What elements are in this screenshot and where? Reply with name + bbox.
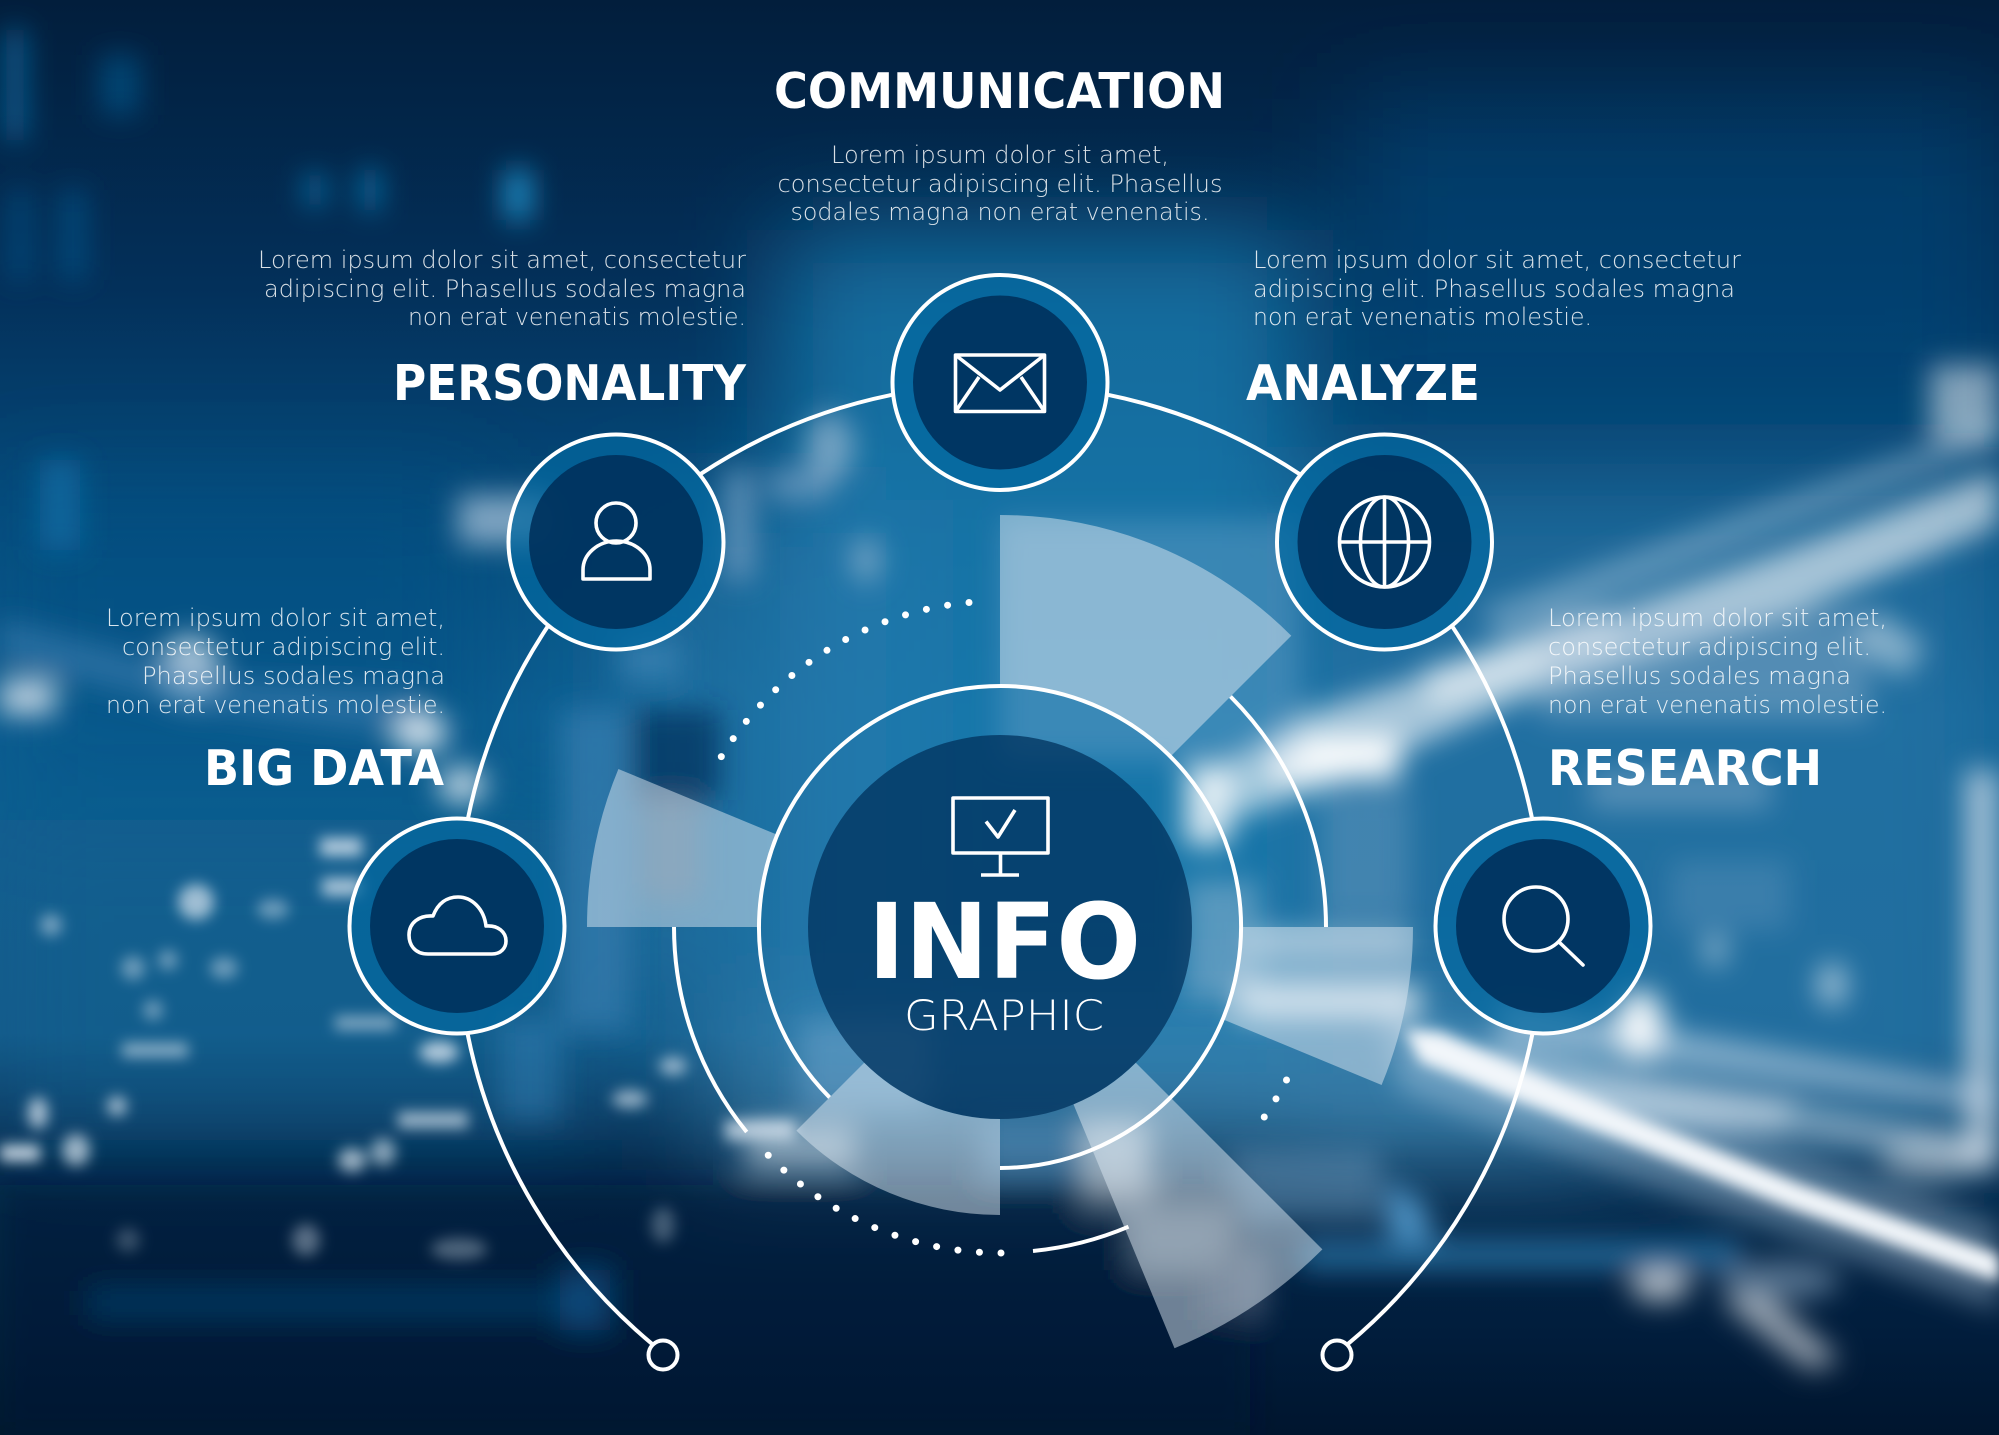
end marker right — [1322, 1340, 1352, 1370]
heading: communication: COMMUNICATION — [774, 63, 1225, 120]
middle arcs — [674, 696, 1326, 1251]
text: big data: non erat venenatis molestie. — [106, 691, 445, 719]
icon: person — [583, 503, 650, 579]
text: communication: consectetur adipiscing elit. Phasellus — [778, 170, 1222, 198]
text: analyze: non erat venenatis molestie. — [1253, 303, 1592, 331]
heading: research: RESEARCH — [1548, 740, 1822, 797]
text: big data: consectetur adipiscing elit. — [122, 633, 445, 661]
icon: envelope — [956, 355, 1044, 412]
heading: personality: PERSONALITY — [393, 355, 746, 412]
text: research — [1548, 604, 1887, 719]
center title: INFO — [868, 881, 1141, 1003]
text: communication — [778, 141, 1222, 226]
center dark disc — [808, 735, 1192, 1119]
wedge: bottom right — [1074, 1063, 1322, 1348]
wedge: right — [1223, 927, 1413, 1085]
text: analyze: Lorem ipsum dolor sit amet, consectetur — [1253, 246, 1741, 274]
inner ring — [759, 686, 1241, 1168]
wedge: bottom left — [796, 1063, 1000, 1215]
wedge: left — [587, 769, 777, 927]
node: personality — [508, 434, 724, 650]
text: research: Phasellus sodales magna — [1548, 662, 1851, 690]
node: research — [1436, 818, 1650, 1034]
node: big data — [350, 818, 564, 1034]
wedge: top right — [1000, 515, 1291, 757]
outer connector arc — [468, 395, 1532, 1345]
node: analyze — [1277, 434, 1492, 650]
icon: cloud — [409, 897, 506, 954]
text: big data — [106, 604, 445, 719]
text: research: non erat venenatis molestie. — [1548, 691, 1887, 719]
text: personality: adipiscing elit. Phasellus sodales magna — [264, 275, 746, 303]
heading: big data: BIG DATA — [204, 740, 444, 797]
text: research: Lorem ipsum dolor sit amet, — [1548, 604, 1887, 632]
end marker left — [648, 1340, 678, 1370]
text: personality: non erat venenatis molestie. — [408, 303, 746, 331]
text: personality: Lorem ipsum dolor sit amet, consectetur — [258, 246, 746, 274]
icon: magnifier — [1504, 887, 1583, 965]
text: personality — [258, 246, 746, 331]
text: communication: sodales magna non erat venenatis. — [790, 198, 1210, 226]
node: communication — [892, 275, 1108, 490]
center title: GRAPHIC — [904, 991, 1104, 1040]
text: communication: Lorem ipsum dolor sit amet, — [831, 141, 1169, 169]
text: analyze — [1253, 246, 1741, 331]
text: analyze: adipiscing elit. Phasellus sodales magna — [1253, 275, 1735, 303]
text: research: consectetur adipiscing elit. — [1548, 633, 1871, 661]
dotted arcs — [713, 602, 1286, 1253]
icon: globe — [1340, 497, 1430, 587]
text: big data: Lorem ipsum dolor sit amet, — [106, 604, 445, 632]
heading: analyze: ANALYZE — [1246, 355, 1480, 412]
icon: monitor with check — [953, 798, 1048, 875]
text: big data: Phasellus sodales magna — [142, 662, 445, 690]
